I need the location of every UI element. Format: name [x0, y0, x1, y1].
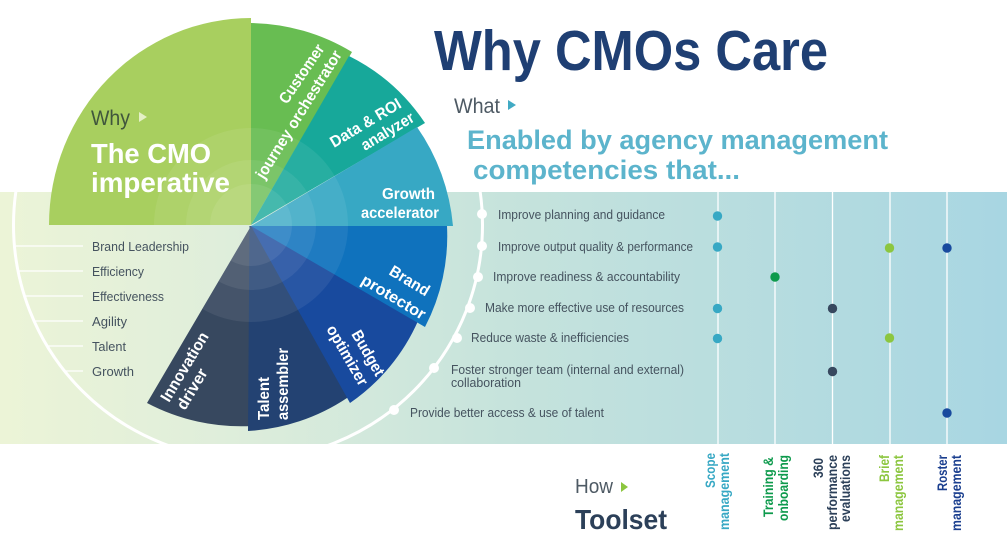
competency list — [410, 207, 693, 420]
tool: training and onboarding: Training & — [760, 457, 776, 517]
tool: roster management — [934, 455, 964, 531]
label: growth accelerator: Growth — [382, 186, 435, 203]
label: growth accelerator: accelerator — [361, 205, 439, 222]
subtitle: competencies that... — [473, 155, 740, 185]
why heading: Why — [91, 107, 130, 130]
label: data and ROI analyzer: Data & ROI — [327, 96, 405, 151]
background band — [0, 192, 1007, 444]
tool: roster management: Roster — [934, 455, 950, 491]
competency list: Reduce waste & inefficiencies — [471, 330, 629, 345]
label: budget optimizer: Budget — [348, 328, 388, 380]
CMO imperative list: Efficiency — [92, 264, 144, 279]
label: innovation driver: driver — [174, 366, 212, 413]
tool: brief management: management — [890, 455, 906, 531]
subtitle: Enabled by agency management — [467, 125, 888, 155]
label: talent assembler: assembler — [275, 348, 292, 420]
the CMO imperative heading: imperative — [91, 167, 230, 198]
label: brand protector: Brand — [386, 263, 432, 300]
label: talent assembler — [256, 348, 292, 420]
segment: The CMO imperative — [49, 18, 251, 225]
competency list: collaboration — [451, 375, 521, 390]
CMO imperative list — [92, 239, 189, 379]
label: customer journey orchestrator: journey orchestrator — [252, 48, 346, 183]
CMO imperative list: Talent — [92, 340, 127, 354]
toolset heading: Toolset — [575, 504, 667, 535]
tool: training and onboarding — [760, 455, 791, 521]
competency list: Foster stronger team (internal and external) — [451, 362, 684, 377]
segment: Data and ROI analyzer — [251, 56, 425, 225]
label: growth accelerator — [361, 186, 439, 222]
segment: Brand protector — [251, 226, 447, 327]
matrix column lines — [718, 192, 947, 444]
label: data and ROI analyzer: analyzer — [358, 109, 418, 154]
segment: Customer journey orchestrator — [251, 23, 352, 225]
outer white arc with milestones — [12, 192, 487, 444]
competency list: Make more effective use of resources — [485, 300, 684, 315]
CMO imperative list: Brand Leadership — [92, 239, 189, 254]
the CMO imperative heading: The CMO — [91, 138, 211, 169]
the CMO imperative heading — [91, 138, 230, 198]
tool labels — [702, 453, 964, 531]
tool: scope management: Scope — [702, 453, 718, 488]
title: Why CMOs Care — [434, 19, 828, 83]
pie labels — [158, 41, 439, 420]
tool: training and onboarding: onboarding — [775, 455, 791, 521]
tool: brief management: Brief — [876, 455, 892, 482]
CMO imperative list: Effectiveness — [92, 289, 164, 304]
pie chart — [49, 18, 453, 431]
label: talent assembler: Talent — [256, 376, 273, 420]
CMO imperative list: Agility — [92, 315, 128, 329]
segment: Innovation driver — [147, 226, 252, 426]
tool: roster management: management — [948, 455, 964, 531]
tool: 360 performance evaluations: evaluations — [837, 455, 853, 522]
segment: Growth accelerator — [251, 127, 453, 226]
tool: brief management — [876, 455, 906, 531]
tool: 360 performance evaluations: 360 — [810, 458, 826, 478]
matrix dots — [713, 211, 952, 418]
what heading: What — [454, 95, 500, 118]
concentric rings — [154, 128, 348, 322]
tool: scope management: management — [716, 453, 732, 530]
label: brand protector: protector — [358, 272, 428, 324]
label: innovation driver: Innovation — [158, 329, 213, 405]
competency list: Provide better access & use of talent — [410, 405, 604, 420]
how heading: How — [575, 476, 614, 498]
label: customer journey orchestrator: Customer — [276, 41, 328, 107]
tool: 360 performance evaluations: performance — [824, 455, 840, 530]
segment: Budget optimizer — [251, 226, 425, 403]
tool: scope management — [702, 453, 732, 530]
CMO imperative list: Growth — [92, 365, 134, 379]
competency list: Improve readiness & accountability — [493, 269, 680, 284]
tool: 360 performance evaluations — [810, 455, 853, 530]
competency list: Improve planning and guidance — [498, 207, 665, 222]
competency list: Improve output quality & performance — [498, 239, 693, 254]
label: budget optimizer: optimizer — [323, 322, 371, 389]
segment: Talent assembler — [248, 226, 352, 431]
subtitle — [467, 125, 888, 185]
